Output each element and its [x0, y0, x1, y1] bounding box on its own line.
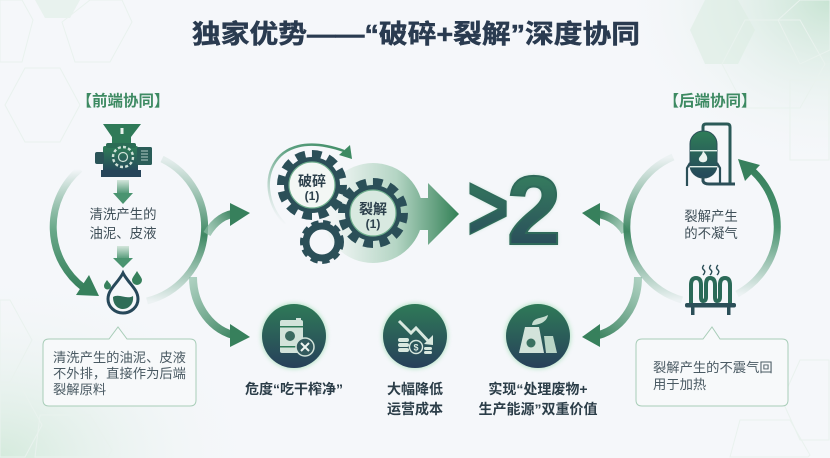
- big number: [467, 154, 561, 265]
- heading: front-end synergy: 【前端协同】: [76, 91, 170, 110]
- gear: small: [303, 223, 341, 261]
- text: cycle description right: 的不凝气: [684, 226, 738, 241]
- callout: front-end note: 裂解原料: [53, 382, 106, 397]
- label: hazardous: 危度“吃干榨净”: [245, 381, 343, 397]
- big number: >: [467, 154, 509, 260]
- text: cycle description right: 裂解产生: [684, 209, 738, 224]
- arrow: left cycle arc: [53, 169, 99, 296]
- title: 独家优势——“破碎+裂解”深度协同: [192, 19, 640, 49]
- gear: cracking: 裂解: [359, 201, 387, 217]
- big number: 2: [507, 156, 561, 265]
- arrow: branch to hazard icon: [193, 277, 250, 347]
- text: cycle description left: [90, 207, 156, 241]
- label: energy: [478, 381, 598, 417]
- big number: >: [467, 154, 509, 260]
- arrow: branch from back-end up: [582, 203, 625, 232]
- label: cost: [387, 381, 443, 417]
- label: energy: 实现“处理废物+: [488, 381, 588, 397]
- icon: crusher: [95, 124, 152, 177]
- icon: heater: [685, 265, 736, 315]
- arrow: left back-end arc: [627, 157, 682, 300]
- icon: cracking tank: [687, 124, 735, 186]
- icon circle: cost reduction: $: [413, 342, 419, 352]
- icon circle: energy value: [505, 303, 571, 369]
- arrow: right cycle arc: [147, 159, 205, 301]
- callout: back-end note: 用于加热: [653, 377, 706, 392]
- icon circle: hazardous waste: [261, 303, 327, 369]
- arrow: right back-end arc: [737, 159, 777, 294]
- arrow: crusher to text: [113, 180, 133, 204]
- text: cycle description left: 油泥、皮液: [90, 226, 156, 241]
- heading: back-end synergy: 【后端协同】: [663, 92, 757, 110]
- callout: front-end note: [43, 327, 196, 406]
- big number: 2: [507, 156, 561, 265]
- icon: oil drop: [104, 271, 142, 313]
- arrow: branch to gears: [207, 203, 250, 234]
- circle behind gears with arrow: [323, 163, 459, 263]
- gear: crushing: (1): [305, 189, 319, 203]
- label: cost: 运营成本: [387, 401, 443, 417]
- arrow: branch from back-end down: [582, 277, 638, 347]
- arrow: circular around crusher gear: [269, 145, 352, 224]
- callout: front-end note: 清洗产生的油泥、皮液: [53, 350, 186, 365]
- arrow: text to drop: [113, 246, 133, 268]
- label: energy: 生产能源”双重价值: [478, 401, 598, 417]
- text: cycle description right: [684, 209, 738, 241]
- gear: crushing: [281, 154, 343, 216]
- callout: back-end note: 裂解产生的不震气回: [653, 360, 773, 375]
- text: cycle description left: 清洗产生的: [90, 207, 156, 222]
- icon circle: cost reduction: [382, 303, 448, 369]
- gear: cracking: (1): [366, 217, 380, 231]
- callout: back-end note: [636, 327, 788, 406]
- callout: front-end note: 不外排，直接作为后端: [53, 365, 186, 381]
- gear: crushing: 破碎: [298, 173, 326, 189]
- gear: cracking: [342, 182, 404, 244]
- label: cost: 大幅降低: [387, 381, 443, 397]
